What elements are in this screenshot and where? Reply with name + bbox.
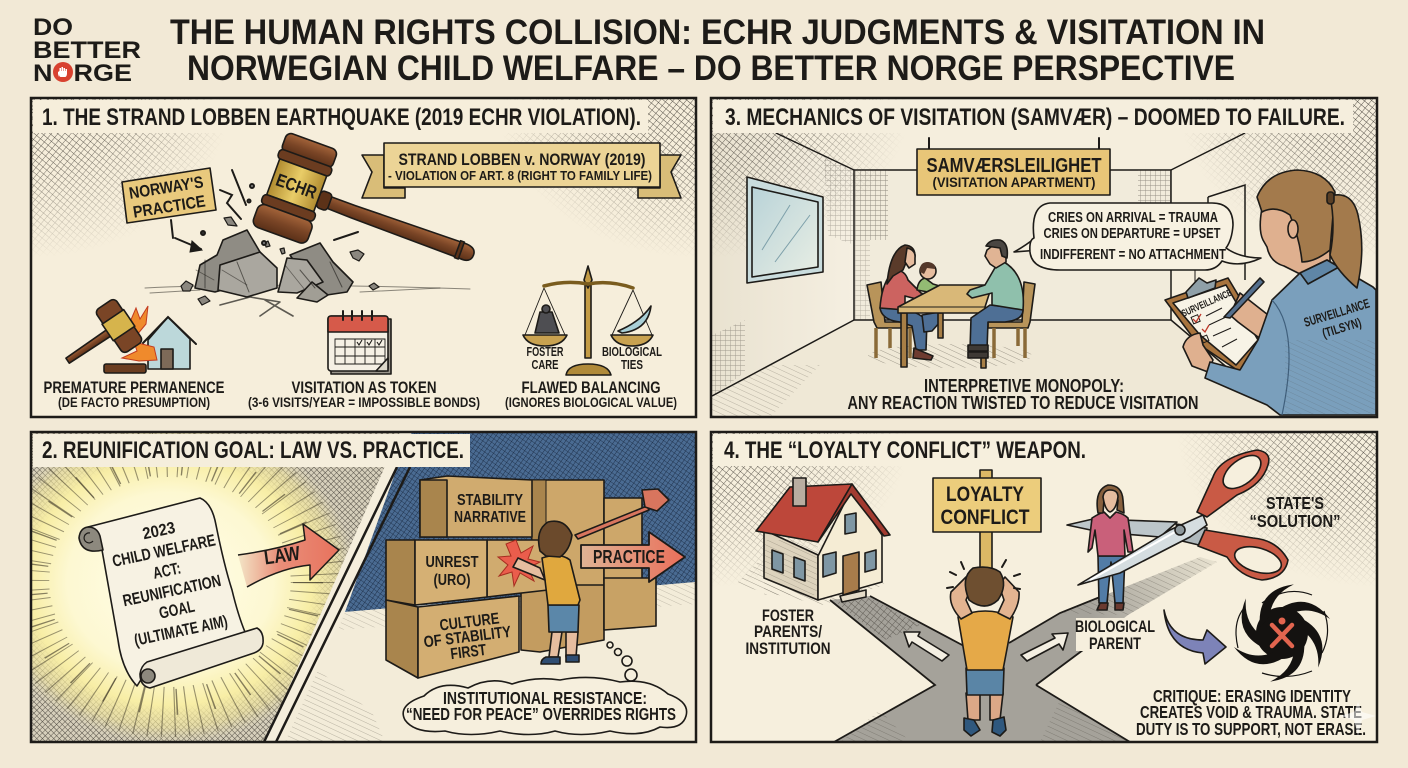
left side: law glow bbox=[32, 433, 400, 741]
banner: Strand Lobben v. Norway: - VIOLATION OF ART. 8 (RIGHT TO FAMILY LIFE) bbox=[388, 168, 652, 183]
caption: flawed balancing bbox=[505, 378, 677, 410]
mother bbox=[880, 307, 927, 350]
heading: panel 2: 2. REUNIFICATION GOAL: LAW VS. PRACTICE. bbox=[42, 437, 464, 464]
thought cloud: institutional resistance: INSTITUTIONAL RESISTANCE: bbox=[443, 688, 647, 708]
heading: panel 1: 1. THE STRAND LOBBEN EARTHQUAKE (2019 ECHR VIOLATION). bbox=[42, 104, 641, 131]
surveillance officer with clipboard: SURVEILLANCE bbox=[1180, 288, 1234, 320]
label: foster parents bbox=[746, 607, 830, 658]
caption: premature permanence: (DE FACTO PRESUMPTION) bbox=[58, 395, 210, 410]
signpost: loyalty conflict bbox=[933, 470, 1041, 570]
logo: Do Better Norge: DO bbox=[33, 14, 73, 41]
hair bbox=[1257, 170, 1335, 262]
sign: Norway's practice: PRACTICE bbox=[132, 192, 207, 222]
jacket bbox=[1205, 260, 1376, 415]
speech bubble: reactions: INDIFFERENT = NO ATTACHMENT bbox=[1040, 247, 1226, 263]
panel 1: Strand Lobben earthquake bbox=[31, 98, 696, 417]
window bbox=[747, 177, 823, 283]
label: foster parents: PARENTS/ bbox=[754, 623, 822, 641]
critique text: CRITIQUE: ERASING IDENTITY bbox=[1153, 686, 1351, 706]
sign: Samværsleilighet: (VISITATION APARTMENT) bbox=[932, 174, 1096, 190]
surveillance officer with clipboard bbox=[1165, 170, 1376, 415]
cardboard boxes: (URO) bbox=[434, 572, 470, 589]
logo: Do Better Norge bbox=[33, 14, 141, 87]
signpost: loyalty conflict: LOYALTY bbox=[946, 483, 1024, 506]
title: THE HUMAN RIGHTS COLLISION: ECHR JUDGMENTS & VISITATION IN bbox=[170, 13, 1265, 52]
impact cracks bbox=[201, 170, 358, 245]
label: state's solution: “SOLUTION” bbox=[1250, 511, 1340, 531]
gavel: ECHR bbox=[251, 131, 491, 300]
banner: Strand Lobben v. Norway: STRAND LOBBEN v. NORWAY (2019) bbox=[398, 150, 646, 169]
scroll: 2023 Child Welfare Act: ACT: bbox=[151, 559, 183, 583]
scroll: 2023 Child Welfare Act: REUNIFICATION bbox=[121, 572, 223, 610]
clipboard bbox=[1165, 278, 1265, 372]
scroll: 2023 Child Welfare Act: 2023 bbox=[141, 519, 177, 543]
cardboard boxes: FIRST bbox=[450, 642, 488, 663]
room: walls and floor bbox=[711, 98, 1377, 417]
surveillance officer with clipboard: SURVEILLANCE bbox=[1302, 296, 1372, 330]
caption: premature permanence: PREMATURE PERMANENCE bbox=[44, 378, 224, 397]
scroll: 2023 Child Welfare Act: CHILD WELFARE bbox=[111, 531, 217, 571]
rocks: broken practice bbox=[145, 217, 470, 316]
icon: balance scale: BIOLOGICAL bbox=[602, 345, 662, 359]
icon: gavel striking house bbox=[53, 297, 196, 382]
sign: Samværsleilighet bbox=[917, 138, 1110, 195]
left hand bbox=[1183, 333, 1213, 372]
sign: Norway's practice bbox=[122, 168, 216, 252]
caption: visitation as token bbox=[248, 378, 480, 410]
panel 2: reunification goal bbox=[0, 420, 696, 744]
logo: Do Better Norge: NORGE bbox=[33, 60, 132, 87]
label: biological parent: BIOLOGICAL bbox=[1075, 618, 1155, 636]
banner: Strand Lobben v. Norway bbox=[362, 143, 681, 198]
woman: biological parent bbox=[1088, 485, 1133, 610]
speech bubble: reactions: CRIES ON DEPARTURE = UPSET bbox=[1044, 226, 1221, 242]
arrow: law: LAW bbox=[263, 543, 302, 569]
speech bubble: reactions: CRIES ON ARRIVAL = TRAUMA bbox=[1048, 210, 1218, 226]
cardboard boxes bbox=[386, 476, 656, 678]
icon: void swirl bbox=[1231, 576, 1333, 690]
icon: balance scale: TIES bbox=[621, 358, 643, 372]
caption: interpretive monopoly: ANY REACTION TWISTED TO REDUCE VISITATION bbox=[848, 393, 1198, 413]
icon: balance scale bbox=[523, 266, 662, 375]
scroll: 2023 Child Welfare Act: GOAL bbox=[157, 598, 196, 623]
label: state's solution bbox=[1250, 493, 1340, 531]
cardboard boxes: CULTURE bbox=[439, 610, 501, 635]
scroll: 2023 Child Welfare Act: (ULTIMATE AIM) bbox=[133, 612, 229, 650]
caption: visitation as token: VISITATION AS TOKEN bbox=[292, 378, 436, 397]
house: foster parents bbox=[735, 478, 890, 605]
cardboard boxes: NARRATIVE bbox=[454, 509, 526, 526]
icon: balance scale: CARE bbox=[532, 358, 558, 372]
logo: Do Better Norge: BETTER bbox=[33, 37, 141, 64]
sign: Samværsleilighet: SAMVÆRSLEILIGHET bbox=[926, 155, 1102, 177]
speech bubble: reactions bbox=[1014, 203, 1261, 270]
left chair bbox=[867, 282, 913, 328]
icon: balance scale: FOSTER bbox=[526, 345, 564, 359]
thought cloud: institutional resistance bbox=[403, 642, 687, 734]
pen hand bbox=[1230, 293, 1272, 340]
signpost: loyalty conflict: CONFLICT bbox=[940, 506, 1030, 529]
crossroads bbox=[830, 557, 1217, 742]
caption: flawed balancing: FLAWED BALANCING bbox=[522, 378, 660, 397]
family at table bbox=[867, 240, 1035, 368]
child at the crossroads bbox=[947, 560, 1020, 736]
caption: interpretive monopoly: INTERPRETIVE MONOPOLY: bbox=[924, 376, 1124, 396]
caption: flawed balancing: (IGNORES BIOLOGICAL VALUE) bbox=[505, 395, 677, 410]
critique text bbox=[1136, 686, 1366, 739]
panel 4: loyalty conflict bbox=[711, 432, 1377, 742]
surveillance officer with clipboard: (TILSYN) bbox=[1320, 315, 1363, 341]
father bbox=[970, 305, 1023, 350]
caption: visitation as token: (3-6 VISITS/YEAR = IMPOSSIBLE BONDS) bbox=[248, 395, 480, 410]
panel 3: mechanics of visitation bbox=[711, 98, 1377, 417]
face and neck bbox=[1260, 208, 1330, 274]
arrow: practice bbox=[581, 532, 685, 582]
label: state's solution: STATE'S bbox=[1266, 493, 1324, 513]
caption: premature permanence bbox=[44, 378, 224, 410]
arrow: practice: PRACTICE bbox=[593, 547, 665, 567]
table bbox=[901, 313, 986, 368]
scissors: state's solution bbox=[1078, 449, 1288, 585]
arrow: curved blue bbox=[1164, 610, 1226, 664]
scroll: 2023 Child Welfare Act bbox=[79, 498, 263, 688]
cardboard boxes: UNREST bbox=[426, 554, 479, 571]
heading: panel 4: 4. THE “LOYALTY CONFLICT” WEAPON. bbox=[724, 437, 1086, 464]
label: biological parent: PARENT bbox=[1089, 635, 1141, 653]
icon: calendar bbox=[328, 311, 391, 374]
right side: practice backdrop bbox=[277, 432, 696, 742]
sign: Norway's practice: NORWAY'S bbox=[128, 173, 205, 203]
caption: interpretive monopoly bbox=[848, 376, 1198, 413]
thought cloud: institutional resistance: “NEED FOR PEACE” OVERRIDES RIGHTS bbox=[406, 704, 676, 724]
label: biological parent bbox=[1075, 618, 1155, 653]
label: foster parents: FOSTER bbox=[762, 607, 814, 625]
scissors rear blade bbox=[1067, 519, 1177, 537]
cardboard boxes: OF STABILITY bbox=[423, 624, 512, 651]
cardboard boxes: STABILITY bbox=[457, 492, 523, 509]
broken arrow bbox=[575, 489, 669, 539]
child bbox=[922, 312, 940, 332]
child pushing boxes bbox=[498, 521, 580, 664]
gavel: ECHR: ECHR bbox=[273, 170, 320, 203]
right chair bbox=[988, 282, 1035, 328]
title bbox=[170, 13, 1265, 88]
title: NORWEGIAN CHILD WELFARE – DO BETTER NORGE PERSPECTIVE bbox=[187, 49, 1235, 88]
label: foster parents: INSTITUTION bbox=[746, 640, 830, 658]
arrow: law bbox=[238, 524, 339, 587]
